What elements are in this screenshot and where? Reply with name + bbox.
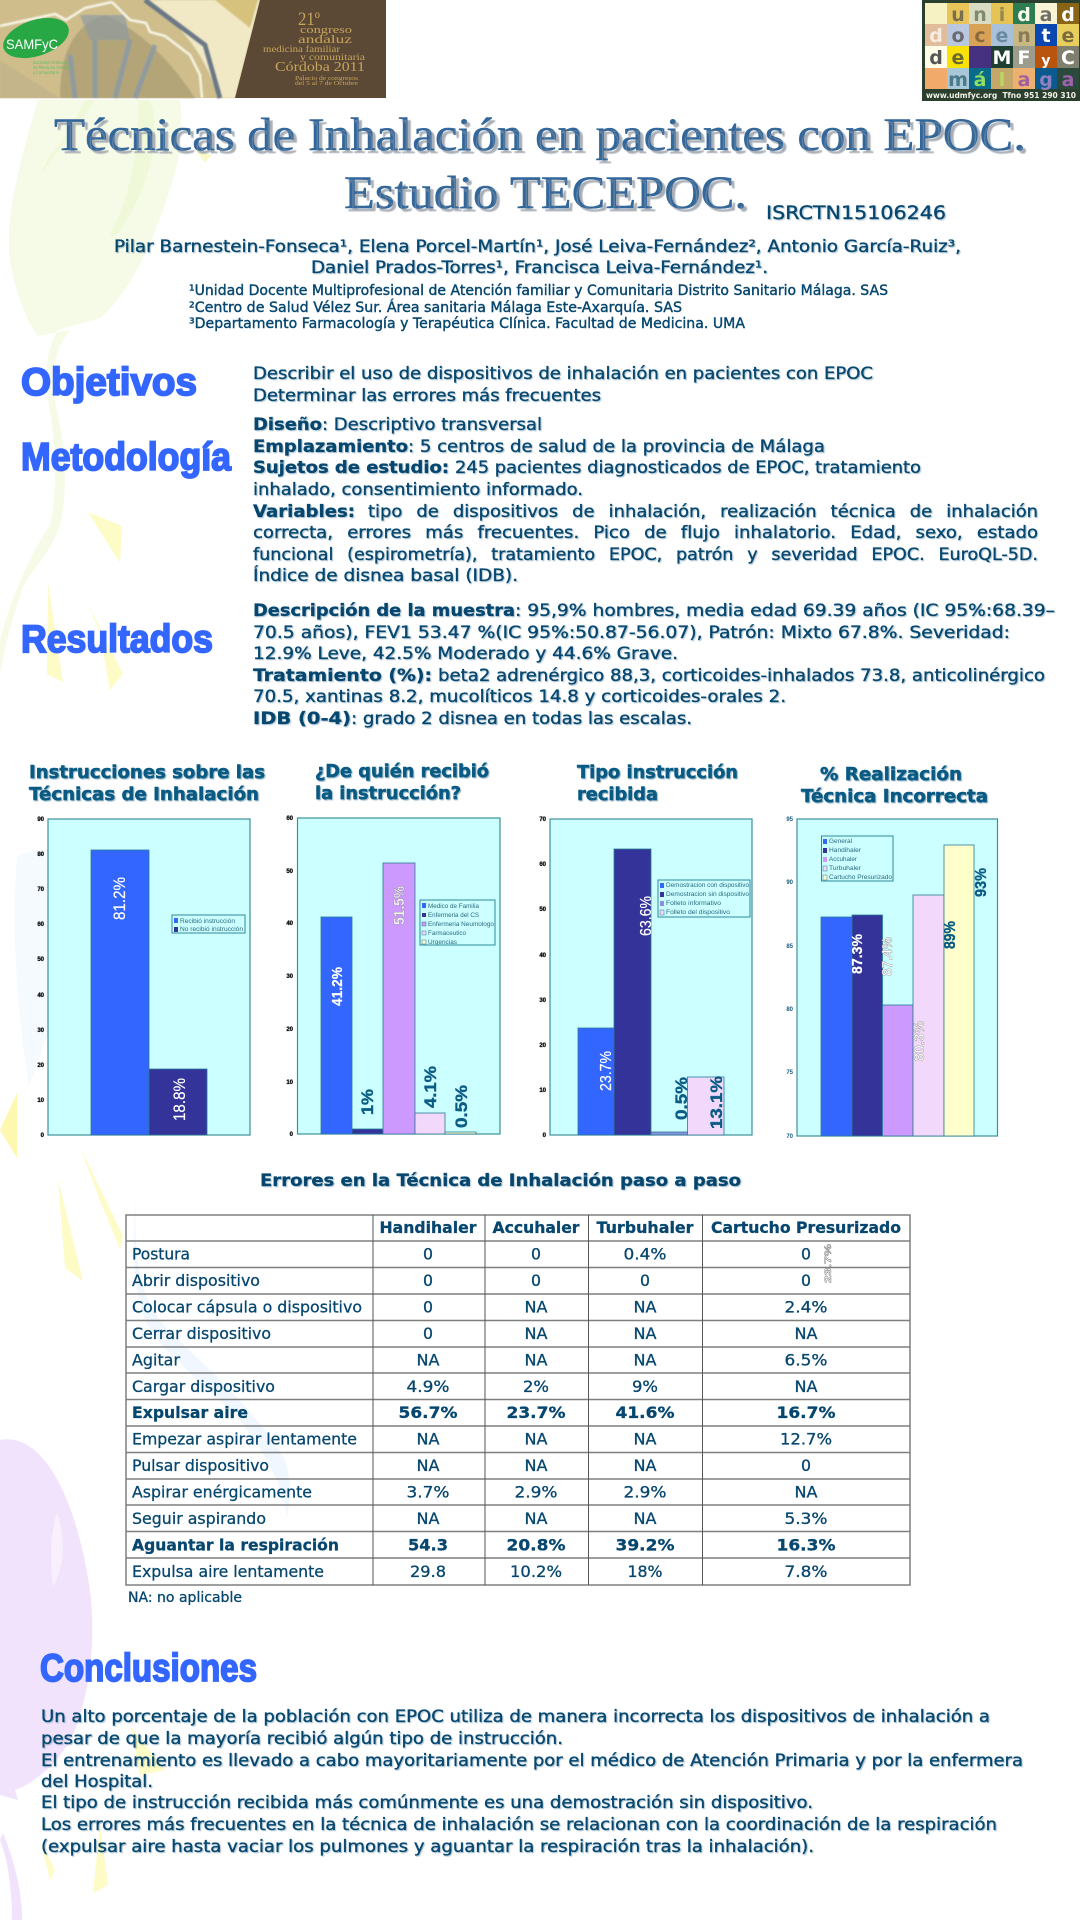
text block: conclusiones: El tipo de instrucción recibida más comúnmente es una demostración sin dispositivo. xyxy=(41,1793,813,1813)
bar chart: instructor xyxy=(286,816,500,1138)
bar chart: instructor: 41.2% xyxy=(329,967,346,1006)
bar chart: received instruction: 0 xyxy=(41,1133,45,1139)
table values: 16.7% xyxy=(776,1403,836,1422)
table header row: Cartucho Presurizado xyxy=(711,1218,901,1237)
logo: unidad docente de MFyC malaga: d xyxy=(929,25,943,47)
bar chart: received instruction: 18.8% xyxy=(170,1078,189,1121)
bar chart: incorrect technique: 87.4% xyxy=(879,937,896,976)
bar chart: incorrect technique: 90 xyxy=(786,880,794,886)
legend: Medico de Familia xyxy=(428,903,479,910)
table: errores paso a paso xyxy=(126,1215,910,1585)
table values: 6.5% xyxy=(784,1350,828,1369)
table values: 2.9% xyxy=(624,1482,666,1502)
bar chart: instructor: 20 xyxy=(286,1027,294,1033)
bar chart: instruction type xyxy=(539,817,752,1139)
legend xyxy=(658,880,750,917)
legend: Folleto del dispositivo xyxy=(666,909,730,916)
congress text: y comunitaria xyxy=(300,52,365,62)
congress banner photo xyxy=(0,0,386,98)
affiliations: ²Centro de Salud Vélez Sur. Área sanitaria Málaga Este-Axarquía. SAS xyxy=(189,299,682,316)
heading: chart 4 title: Técnica Incorrecta xyxy=(801,786,988,807)
heading: chart 4 title xyxy=(801,764,988,807)
text block: conclusiones: El entrenamiento es llevado a cabo mayoritariamente por el médico de Atención Primaria y por la enfermera xyxy=(41,1751,1023,1771)
bar chart: instruction type: 13.1% xyxy=(707,1076,726,1129)
legend: Cartucho Presurizado xyxy=(829,874,892,881)
bar chart: incorrect technique: 95 xyxy=(786,817,794,823)
table note: NA: no aplicable xyxy=(128,1590,242,1606)
text block: conclusiones: del Hospital. xyxy=(41,1772,153,1792)
text block: resultados: 70.5, xantinas 8.2, mucolíticos 14.8 y corticoides-orales 2. xyxy=(253,687,786,707)
text block: objetivos: Describir el uso de dispositivos de inhalación en pacientes con EPOC xyxy=(253,364,873,384)
table values: 3.7% xyxy=(406,1482,450,1502)
bar chart: incorrect technique: 85 xyxy=(786,944,794,950)
logo: unidad docente de MFyC malaga: d xyxy=(1017,4,1031,26)
logo: unidad docente de MFyC malaga: m xyxy=(948,69,968,91)
heading: chart 3 title: recibida xyxy=(577,784,658,805)
text block: resultados xyxy=(253,601,1055,729)
table values: NA xyxy=(634,1324,657,1343)
bar chart: incorrect technique: 80.3% xyxy=(911,1021,928,1061)
bar chart: instructor: 0 xyxy=(290,1132,294,1138)
bar chart: received instruction: 70 xyxy=(37,887,45,893)
text block: resultados: IDB (0-4) xyxy=(253,709,351,729)
text block: conclusiones: (expulsar aire hasta vaciar los pulmones y aguantar la respiración tras la inhalación). xyxy=(41,1837,814,1857)
bar chart: instruction type: 10 xyxy=(539,1088,547,1094)
logo: unidad docente de MFyC malaga: M xyxy=(993,47,1011,69)
table values: 23.7% xyxy=(506,1403,566,1422)
logo: unidad docente de MFyC malaga: www.udmfyc.org Tfno 951 290 310 xyxy=(926,91,1076,100)
table header row xyxy=(380,1218,901,1237)
legend: Farmaceutico xyxy=(428,930,466,937)
bar chart: incorrect technique xyxy=(786,817,998,1140)
congress text: andaluz xyxy=(298,32,352,46)
text block: resultados: 70.5 años), FEV1 53.47 %(IC 95%:50.87-56.07), Patrón: Mixto 67.8%. Severidad: xyxy=(253,623,1010,643)
congress text: Córdoba 2011 xyxy=(275,60,365,75)
congress text: 21º xyxy=(298,9,320,30)
logo: unidad docente de MFyC malaga: a xyxy=(1062,69,1074,91)
row labels: Empezar aspirar lentamente xyxy=(132,1430,357,1449)
bar chart: incorrect technique: 70 xyxy=(786,1134,794,1140)
table values: 12.7% xyxy=(780,1430,832,1449)
table values: 18% xyxy=(628,1562,662,1581)
table values: NA xyxy=(416,1456,440,1475)
heading: chart 3 title: Tipo instrucción xyxy=(577,762,738,783)
panel: chart 2 de quien xyxy=(286,761,500,1138)
table values: 7.8% xyxy=(784,1562,828,1581)
logo: unidad docente de MFyC malaga: e xyxy=(1062,25,1074,47)
heading: Metodología: Metodología xyxy=(21,436,231,479)
icon: SAMFyC logo: de Medicina Familiar xyxy=(33,65,71,70)
row labels: Agitar xyxy=(132,1350,180,1369)
bar chart: received instruction: 90 xyxy=(37,817,45,823)
logo: unidad docente de MFyC malaga: l xyxy=(999,69,1005,91)
table values: 9% xyxy=(632,1377,658,1396)
heading: Conclusiones: Conclusiones xyxy=(40,1647,257,1690)
row labels: Colocar cápsula o dispositivo xyxy=(132,1298,362,1316)
heading: chart 4 title: % Realización xyxy=(820,764,962,785)
text block: resultados: 12.9% Leve, 42.5% Moderado y 44.6% Grave. xyxy=(253,644,678,664)
text block: metodología: : 5 centros de salud de la provincia de Málaga xyxy=(408,437,825,457)
table values: 2.9% xyxy=(514,1482,558,1502)
text block: metodología: Emplazamiento xyxy=(253,437,408,457)
logo: unidad docente de MFyC malaga: i xyxy=(999,4,1005,26)
table values: 56.7% xyxy=(398,1403,458,1422)
table values: NA xyxy=(634,1509,657,1528)
bar chart: instruction type: 0.5% xyxy=(672,1077,691,1120)
row labels: Aguantar la respiración xyxy=(132,1535,339,1554)
heading: chart 2 title: la instrucción? xyxy=(315,783,461,804)
bar chart: instructor: 10 xyxy=(286,1080,294,1086)
legend: Demostracion sin dispositivo xyxy=(666,891,749,898)
legend xyxy=(420,900,495,946)
legend: Accuhaler xyxy=(829,856,858,863)
text block: resultados: : 95,9% hombres, media edad 69.39 años (IC 95%:68.39– xyxy=(515,601,1055,621)
row labels: Cargar dispositivo xyxy=(132,1377,275,1396)
text block: objetivos: Determinar las errores más frecuentes xyxy=(253,386,601,406)
text block: metodología: Sujetos de estudio: xyxy=(253,458,449,478)
table header row: Turbuhaler xyxy=(596,1218,694,1237)
bar chart: received instruction xyxy=(37,817,250,1139)
table values: NA xyxy=(524,1456,548,1475)
table values: NA xyxy=(634,1298,657,1316)
text block: conclusiones: pesar de que la mayoría recibió algún tipo de instrucción. xyxy=(41,1729,563,1749)
heading: Resultados: Resultados xyxy=(21,618,213,661)
bar chart: received instruction: 80 xyxy=(37,852,45,858)
table values: 0 xyxy=(423,1271,433,1290)
bar chart: received instruction: 81.2% xyxy=(110,877,129,920)
congress text: congreso xyxy=(300,25,352,36)
bar chart: instructor: 4.1% xyxy=(421,1066,440,1108)
row labels: Cerrar dispositivo xyxy=(132,1324,271,1343)
title: Estudio TECEPOC. xyxy=(344,167,747,219)
bar chart: instruction type: 23.7% xyxy=(598,1051,615,1091)
table header row: Handihaler xyxy=(380,1218,477,1237)
table header row: Accuhaler xyxy=(492,1218,580,1237)
table values: NA xyxy=(634,1350,657,1369)
table values: 0 xyxy=(423,1298,433,1316)
icon: SAMFyC logo: Sociedad Andaluza xyxy=(33,60,68,65)
panel: chart 3 tipo instruccion xyxy=(539,762,752,1139)
table values: 29.8 xyxy=(410,1562,446,1581)
congress text: medicina familiar xyxy=(263,44,340,54)
text block: metodología xyxy=(253,415,1038,586)
table values: 0 xyxy=(801,1271,811,1290)
authors xyxy=(114,237,961,278)
table values: NA xyxy=(524,1298,548,1316)
heading: chart 2 title xyxy=(315,761,489,804)
table values: 54.3 xyxy=(408,1535,448,1554)
icon: SAMFyC logo xyxy=(0,10,74,75)
logo: unidad docente de MFyC malaga: n xyxy=(973,4,987,26)
text block: conclusiones: Un alto porcentaje de la población con EPOC utiliza de manera incorrecta los dispositivos de inhalación a xyxy=(41,1707,990,1727)
table values: NA xyxy=(416,1350,440,1369)
bar chart: received instruction: 20 xyxy=(37,1063,45,1069)
text block: objetivos xyxy=(253,364,873,406)
bar chart: instructor: 30 xyxy=(286,974,294,980)
panel: chart 1 instrucciones xyxy=(29,762,265,1139)
bar chart: instruction type: 70 xyxy=(539,817,547,823)
table values: 16.3% xyxy=(776,1535,836,1554)
text block: metodología: inhalado, consentimiento informado. xyxy=(253,480,583,500)
title: Técnicas de Inhalación en pacientes con EPOC. xyxy=(54,109,1026,161)
legend xyxy=(172,915,245,933)
table values: NA xyxy=(634,1456,657,1475)
table values: 10.2% xyxy=(510,1562,562,1581)
table values: 0.4% xyxy=(624,1245,666,1264)
legend: Recibió instrucción xyxy=(180,918,235,925)
table values: NA xyxy=(524,1324,548,1343)
legend: Enfermeria Neumologo xyxy=(428,921,494,928)
bar chart: instruction type: 60 xyxy=(539,862,547,868)
heading: chart 2 title: ¿De quién recibió xyxy=(315,761,489,782)
legend: Handihaler xyxy=(829,847,862,854)
heading: chart 1 title: Instrucciones sobre las xyxy=(29,762,265,783)
bar chart: instruction type: 20 xyxy=(539,1043,547,1049)
table values: 0 xyxy=(423,1324,433,1343)
bar chart: received instruction: 10 xyxy=(37,1098,45,1104)
table values: 4.9% xyxy=(406,1377,450,1396)
table values: NA xyxy=(416,1509,440,1528)
row labels: Expulsa aire lentamente xyxy=(132,1562,324,1581)
authors: Daniel Prados-Torres¹, Francisca Leiva-Fernández¹. xyxy=(311,258,768,278)
bar chart: incorrect technique: 80 xyxy=(786,1007,794,1013)
text block: metodología: Índice de disnea basal (IDB). xyxy=(253,564,518,586)
logo: unidad docente de MFyC malaga: C xyxy=(1061,47,1075,69)
legend: General xyxy=(829,838,853,845)
affiliations xyxy=(189,283,888,332)
text block: resultados: beta2 adrenérgico 88,3, corticoides-inhalados 73.8, anticolinérgico xyxy=(438,666,1045,686)
heading: Objetivos: Objetivos xyxy=(21,361,197,404)
table values: NA xyxy=(524,1509,548,1528)
logo: unidad docente de MFyC malaga: u xyxy=(951,4,965,26)
table values: 20.8% xyxy=(506,1535,566,1554)
text block: metodología: correcta, errores más frecuentes. Pico de flujo inhalatorio. Edad, sexo, estado xyxy=(253,523,1038,543)
heading: table title: Errores en la Técnica de Inhalación paso a paso xyxy=(260,1171,741,1191)
bar chart: incorrect technique: 89% xyxy=(942,921,959,949)
bar chart: instructor: 60 xyxy=(286,816,294,822)
congress text: del 5 al 7 de Octubre xyxy=(295,81,358,87)
row labels: Seguir aspirando xyxy=(132,1509,266,1528)
logo: unidad docente de MFyC malaga: a xyxy=(1040,4,1052,26)
table values: 39.2% xyxy=(616,1535,674,1554)
row labels xyxy=(132,1245,362,1581)
logo: unidad docente de MFyC malaga: d xyxy=(1061,4,1075,26)
affiliations: ³Departamento Farmacología y Terapéutica Clínica. Facultad de Medicina. UMA xyxy=(189,316,745,332)
row labels: Aspirar enérgicamente xyxy=(132,1482,312,1502)
bar chart: received instruction: 60 xyxy=(37,922,45,928)
bar chart: instruction type: 0 xyxy=(543,1133,547,1139)
bar chart: instructor: 1% xyxy=(358,1089,377,1115)
bar chart: instruction type: 50 xyxy=(539,907,547,913)
bar chart: received instruction: 50 xyxy=(37,957,45,963)
text block: metodología: tipo de dispositivos de inhalación, realización técnica de inhalación xyxy=(368,502,1038,522)
text block: resultados: Tratamiento (%): xyxy=(253,666,432,686)
logo: unidad docente de MFyC malaga: g xyxy=(1039,69,1053,91)
bar chart: instruction type: 30 xyxy=(539,998,547,1004)
bar chart: instructor: 51.5% xyxy=(391,886,408,925)
text block: metodología: 245 pacientes diagnosticados de EPOC, tratamiento xyxy=(455,458,921,478)
legend: Enfermeria del CS xyxy=(428,912,480,919)
logo: unidad docente de MFyC malaga: a xyxy=(1018,69,1030,91)
bar chart: received instruction: 40 xyxy=(37,993,45,999)
logo: unidad docente de MFyC malaga: o xyxy=(951,25,965,47)
legend: Demostracion con dispositivo xyxy=(666,882,749,889)
logo: unidad docente de MFyC malaga xyxy=(922,0,1080,101)
text block: resultados: Descripción de la muestra xyxy=(253,601,515,621)
legend: Urgencias xyxy=(428,939,458,946)
table values: NA xyxy=(794,1482,818,1502)
row labels: Postura xyxy=(132,1245,190,1264)
table values: NA xyxy=(634,1430,657,1449)
logo: unidad docente de MFyC malaga: c xyxy=(974,25,986,47)
logo: unidad docente de MFyC malaga: e xyxy=(996,25,1008,47)
legend xyxy=(822,836,893,881)
legend: No recibió instrucción xyxy=(180,926,243,933)
table values: 41.6% xyxy=(616,1403,674,1422)
text block: resultados: : grado 2 disnea en todas las escalas. xyxy=(351,709,692,729)
table values xyxy=(398,1245,836,1581)
table values: NA xyxy=(416,1430,440,1449)
table values: 0 xyxy=(801,1245,811,1264)
table values: 2.4% xyxy=(784,1298,828,1316)
logo: unidad docente de MFyC malaga: y xyxy=(1041,53,1051,69)
icon: SAMFyC logo: y Comunitaria xyxy=(33,70,60,75)
text block: metodología: Diseño xyxy=(253,415,322,435)
table values: NA xyxy=(524,1350,548,1369)
heading: chart 1 title: Técnicas de Inhalación xyxy=(29,784,259,805)
logo: unidad docente de MFyC malaga: n xyxy=(1017,25,1031,47)
row labels: Abrir dispositivo xyxy=(132,1271,260,1290)
table values: 0 xyxy=(640,1271,650,1290)
bar chart: received instruction: 30 xyxy=(37,1028,45,1034)
stray rotated label over table: 23.7% xyxy=(823,1244,833,1283)
authors: Pilar Barnestein-Fonseca¹, Elena Porcel-Martín¹, José Leiva-Fernández², Antonio García-Ruiz³, xyxy=(114,237,961,257)
row labels: Expulsar aire xyxy=(132,1403,248,1422)
heading: chart 1 title xyxy=(29,762,265,805)
logo: unidad docente de MFyC malaga: t xyxy=(1041,25,1051,47)
table values: 0 xyxy=(801,1456,811,1475)
logo: unidad docente de MFyC malaga: F xyxy=(1018,47,1030,69)
logo: unidad docente de MFyC malaga: e xyxy=(952,47,964,69)
table values: NA xyxy=(524,1430,548,1449)
text block: conclusiones xyxy=(41,1707,1023,1857)
table values: 2% xyxy=(523,1377,549,1396)
congress text: Palacio de congresos xyxy=(295,76,359,82)
row labels: Pulsar dispositivo xyxy=(132,1456,269,1475)
text block: conclusiones: Los errores más frecuentes en la técnica de inhalación se relacionan con la coordinación de la respiración xyxy=(41,1815,997,1835)
affiliations: ¹Unidad Docente Multiprofesional de Atención familiar y Comunitaria Distrito Sanitario Málaga. SAS xyxy=(189,283,888,299)
logo: unidad docente de MFyC malaga: d xyxy=(929,47,943,69)
bar chart: instruction type: 63.6% xyxy=(638,896,655,936)
legend: Turbuhaler xyxy=(829,865,862,872)
bar chart: incorrect technique: 75 xyxy=(786,1070,794,1076)
text block: metodología: : Descriptivo transversal xyxy=(322,415,542,435)
text block: metodología: Variables: xyxy=(253,502,355,522)
bar chart: instructor: 0.5% xyxy=(452,1085,471,1128)
title xyxy=(54,109,1026,219)
table values: 0 xyxy=(423,1245,433,1264)
bar chart: instruction type: 40 xyxy=(539,953,547,959)
trial registry code: ISRCTN15106246 xyxy=(766,202,946,224)
table values: 0 xyxy=(531,1245,541,1264)
background decoration: pale flowers and leaves xyxy=(0,100,290,1920)
logo: unidad docente de MFyC malaga: á xyxy=(974,69,986,91)
table values: 5.3% xyxy=(784,1509,828,1528)
legend: Folleto informativo xyxy=(666,900,721,907)
panel: chart 4 realizacion incorrecta xyxy=(786,764,998,1140)
bar chart: incorrect technique: 93% xyxy=(973,868,990,897)
table values: 0 xyxy=(531,1271,541,1290)
heading: chart 3 title xyxy=(577,762,738,805)
bar chart: instructor: 40 xyxy=(286,921,294,927)
table values: NA xyxy=(794,1377,818,1396)
bar chart: incorrect technique: 87.3% xyxy=(849,934,866,974)
icon: SAMFyC logo: SAMFyC xyxy=(6,36,58,52)
text block: metodología: funcional (espirometría), tratamiento EPOC, patrón y severidad EPOC. EuroQL-5D. xyxy=(253,545,1038,565)
table values: NA xyxy=(794,1324,818,1343)
congress text xyxy=(263,9,365,87)
bar chart: instructor: 50 xyxy=(286,869,294,875)
